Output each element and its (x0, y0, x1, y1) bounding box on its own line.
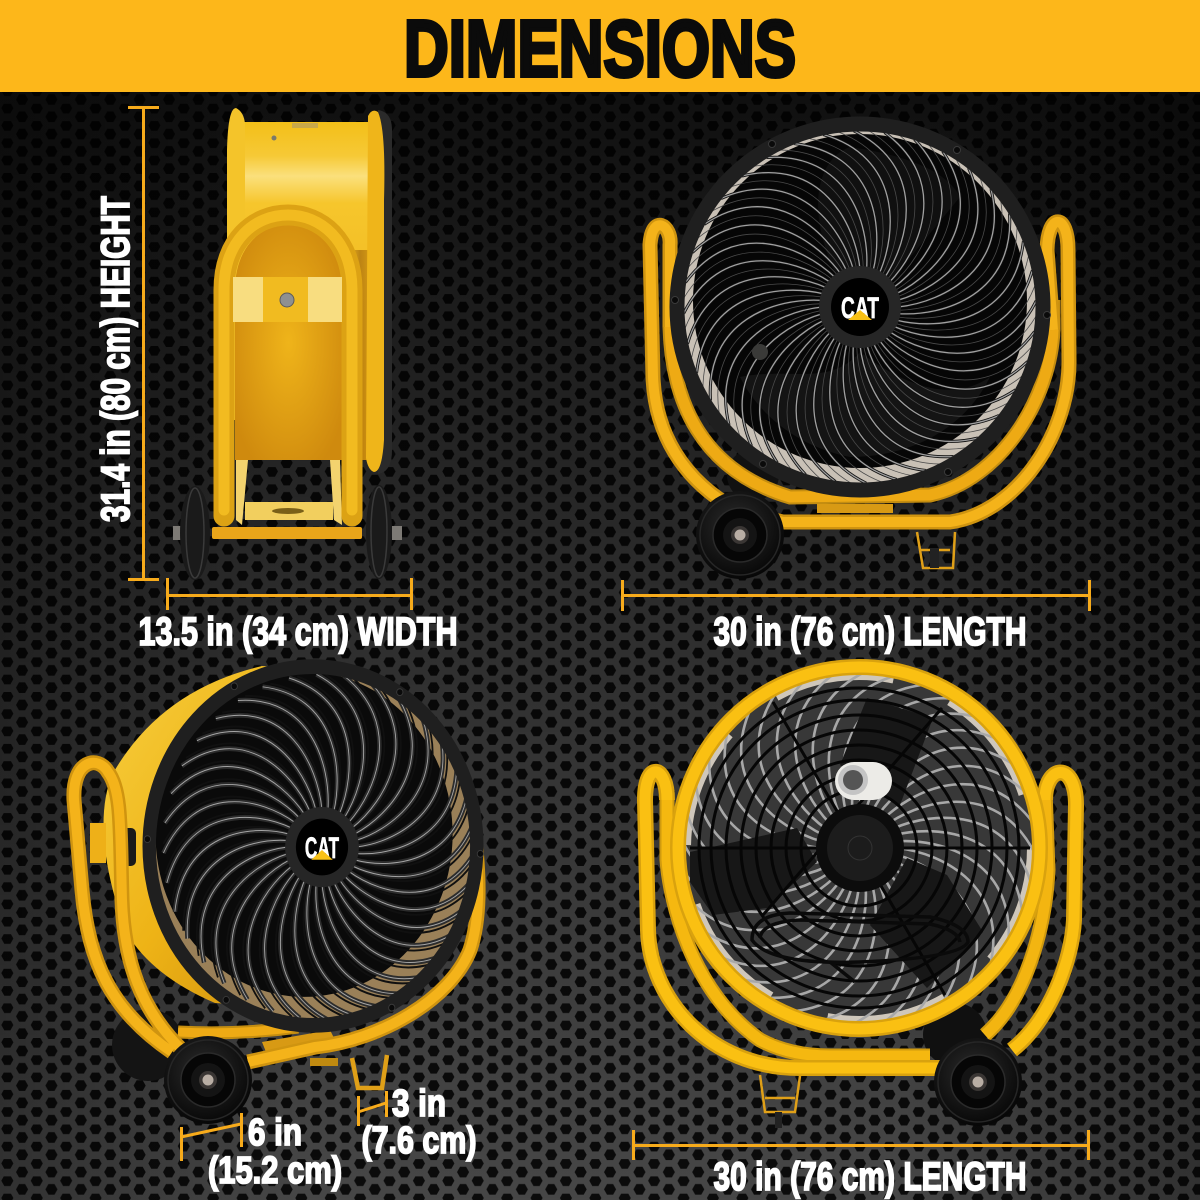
6 inch label (208, 1112, 342, 1192)
base plate (245, 502, 333, 520)
fan rear view (641, 631, 1076, 1128)
length label bottom: 30 in (76 cm) LENGTH (714, 1155, 1026, 1199)
inside of handle (235, 225, 342, 460)
drum body (240, 122, 372, 460)
fan blades (690, 698, 983, 988)
3 inch label: 3 in (392, 1083, 446, 1125)
motor (816, 804, 904, 892)
fan side view (173, 108, 402, 580)
power cord loop (752, 913, 968, 982)
handle arch (224, 215, 352, 516)
yellow ring (678, 667, 1040, 1029)
control knob (835, 762, 892, 800)
height dimension line (128, 107, 159, 580)
axle (212, 527, 362, 539)
wheels (173, 526, 182, 540)
length dimension line bottom (633, 1130, 1088, 1160)
fan angled view (74, 624, 528, 1124)
width label: 13.5 in (34 cm) WIDTH (138, 610, 458, 654)
3 inch label: (7.6 cm) (362, 1120, 476, 1162)
3 inch label (362, 1083, 476, 1162)
3 inch dimension (358, 1091, 386, 1126)
length dimension line top (622, 580, 1090, 611)
fan front view (634, 73, 1096, 579)
title bar (0, 0, 1200, 93)
yellow housing (104, 666, 330, 1010)
clamp strap (233, 277, 342, 322)
6 inch dimension (181, 1113, 242, 1161)
title: DIMENSIONS (404, 4, 796, 93)
6 inch label: 6 in (248, 1112, 302, 1154)
6 inch label: (15.2 cm) (208, 1150, 342, 1192)
height label: 31.4 in (80 cm) HEIGHT (94, 196, 138, 522)
guard wires (690, 688, 1030, 1008)
length label top: 30 in (76 cm) LENGTH (714, 610, 1026, 654)
width dimension line (167, 578, 412, 610)
bracket legs (236, 460, 248, 525)
black gasket (378, 110, 392, 474)
